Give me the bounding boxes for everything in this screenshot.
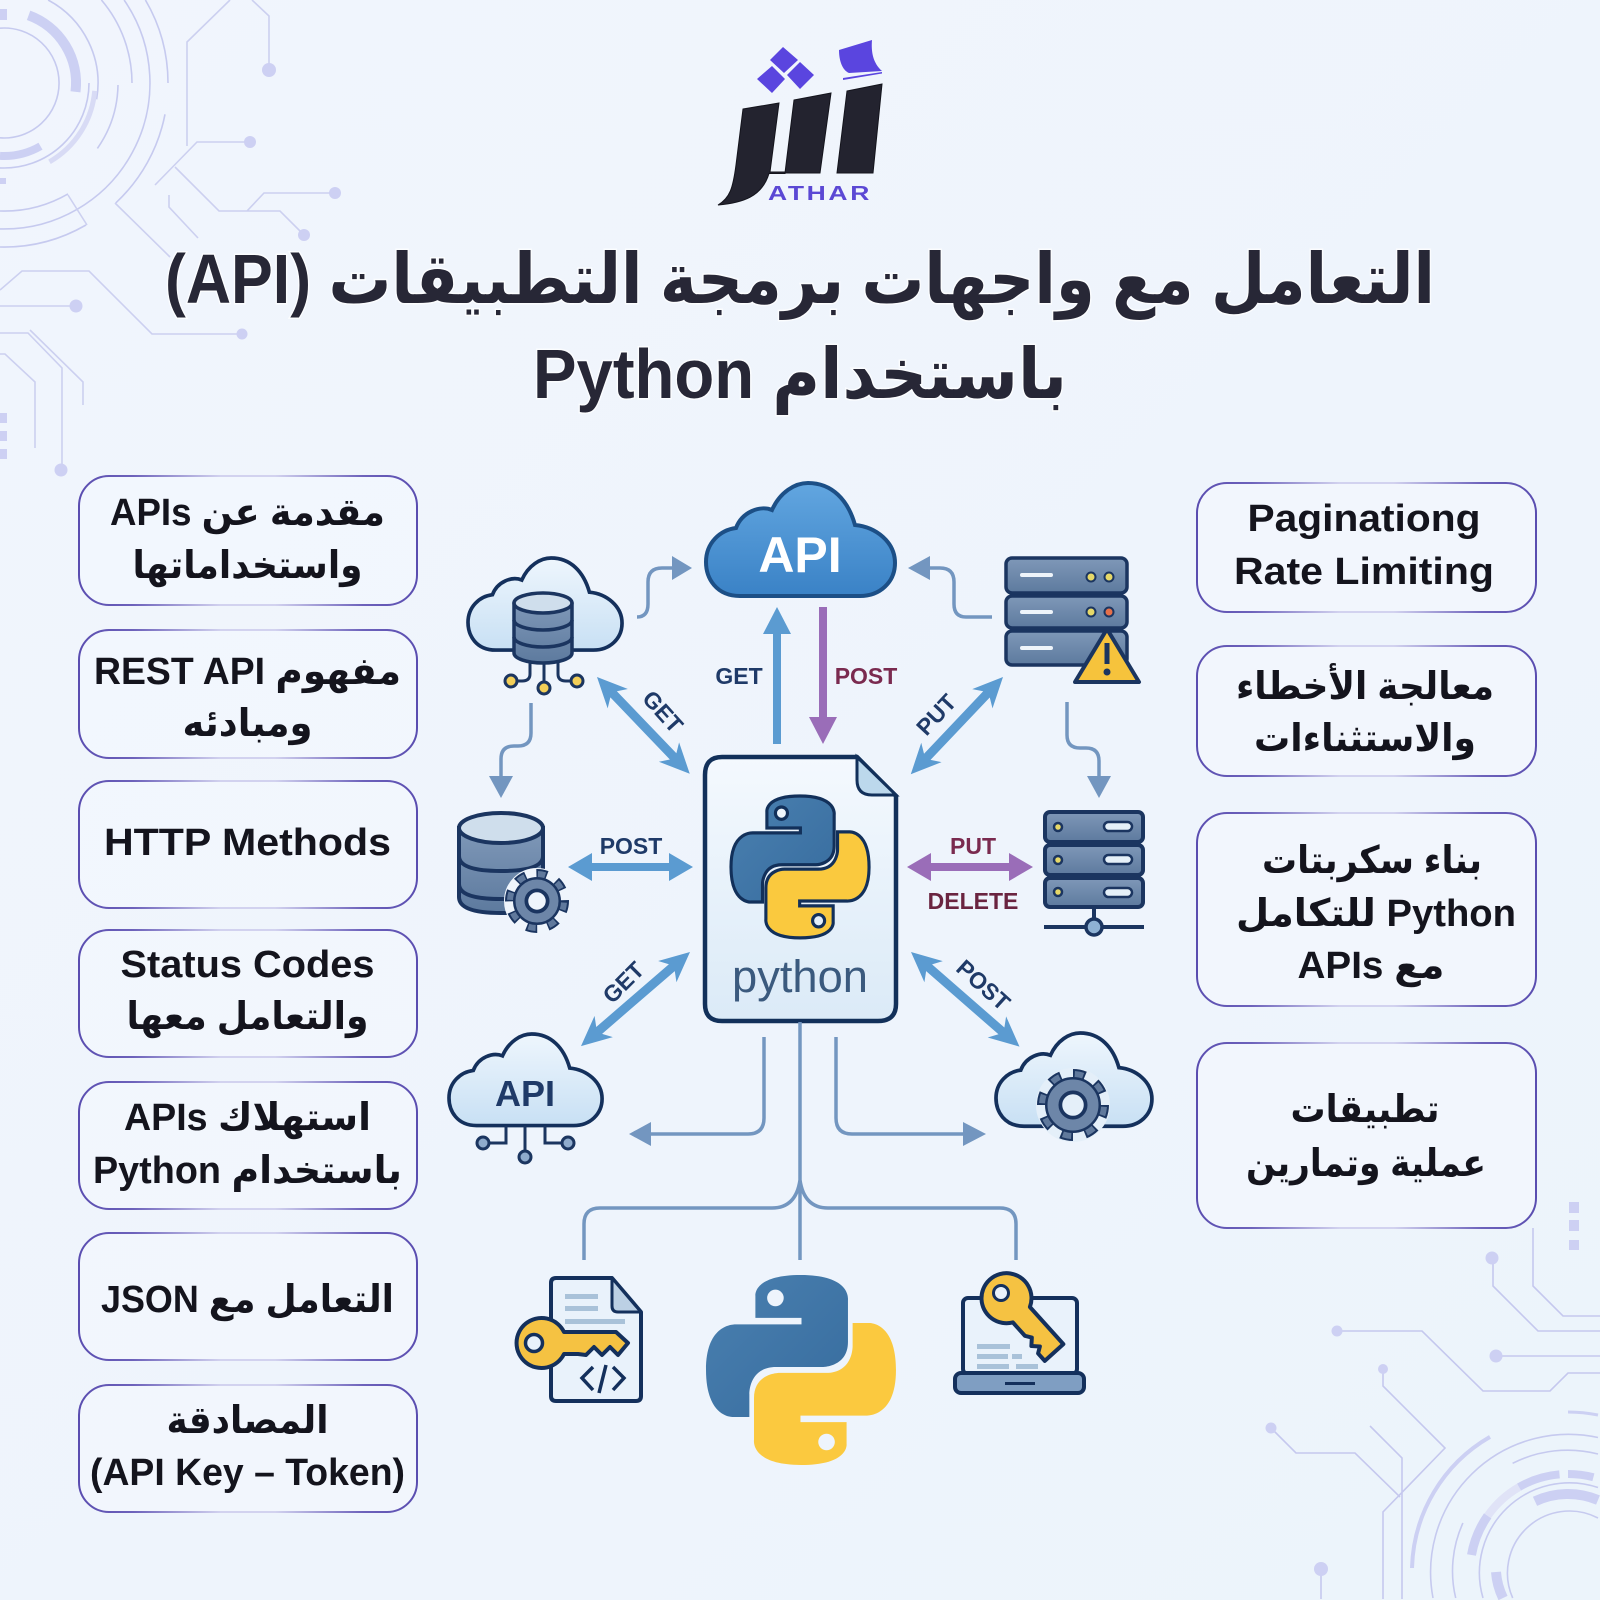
label: PUT: PUT — [950, 833, 996, 859]
icon: network server — [1044, 812, 1144, 935]
card: REST API: ومبادئه — [182, 703, 312, 746]
key — [971, 1263, 1073, 1369]
logo letterforms — [718, 84, 882, 205]
diagram: API flow — [449, 483, 1152, 1465]
icon: API cloud with circuit: API — [495, 1073, 555, 1114]
python wordmark: python — [732, 951, 868, 1002]
arrow: Python to lower left — [629, 1037, 764, 1146]
title line 2: باستخدام Python — [533, 335, 1067, 416]
card: authentication: (API Key – Token) — [90, 1452, 405, 1494]
panel: left topic cards — [79, 476, 417, 1512]
card: introduction to APIs — [79, 476, 417, 605]
card: building Python scripts: بناء سكربتات — [1262, 840, 1482, 882]
icon: database with gear — [459, 813, 563, 927]
label: GET diagonal: GET — [637, 685, 688, 738]
card: consuming APIs with Python: باستخدام Python — [93, 1150, 402, 1193]
card: practical applications — [1197, 1043, 1536, 1228]
card: REST API — [79, 630, 417, 758]
arrow: PUT diagonal top-right — [901, 667, 1013, 784]
card: REST API: مفهوم REST API — [94, 651, 401, 694]
card: practical applications: تطبيقات — [1290, 1089, 1440, 1131]
label: PUT diagonal: PUT — [911, 689, 961, 740]
label: POST diagonal: POST — [951, 954, 1015, 1016]
python logo in file — [731, 796, 869, 938]
label: GET: GET — [715, 663, 763, 689]
arrow: PUT and DELETE horizontal — [907, 853, 1033, 881]
card: building Python scripts: مع APIs — [1298, 945, 1444, 987]
icon: laptop with key — [955, 1263, 1084, 1393]
icon: Python logo — [706, 1275, 896, 1465]
card: error handling — [1197, 646, 1536, 776]
card: Status Codes: والتعامل معها — [126, 996, 368, 1039]
arrow: GET up — [763, 607, 791, 744]
arrow: POST diagonal bottom-right — [902, 941, 1029, 1057]
label: POST: POST — [600, 833, 662, 859]
card: consuming APIs with Python: استهلاك APIs — [124, 1097, 371, 1139]
card: working with JSON: التعامل مع JSON — [101, 1279, 394, 1321]
icon: API cloud — [706, 483, 895, 596]
card: Status Codes — [79, 930, 417, 1057]
card: Status Codes: Status Codes — [120, 944, 374, 986]
arrow: warning server to server — [1067, 702, 1111, 798]
panel: right topic cards — [1197, 483, 1536, 1228]
title line 1: التعامل مع واجهات برمجة التطبيقات (API) — [165, 240, 1435, 320]
card: authentication — [79, 1385, 417, 1512]
card: introduction to APIs: واستخداماتها — [132, 545, 362, 588]
arrow: cloud database to database — [489, 703, 531, 798]
icon: cloud with gear — [996, 1033, 1152, 1135]
card: pagination and rate limiting — [1197, 483, 1536, 612]
logo hamza — [839, 40, 882, 80]
icon: Python file — [705, 757, 896, 1021]
connector: Python to bottom icons — [584, 1022, 1016, 1260]
card: introduction to APIs: مقدمة عن APIs — [110, 492, 385, 534]
logo diamonds — [757, 47, 814, 93]
label: DELETE: DELETE — [928, 888, 1018, 914]
label: POST: POST — [835, 663, 897, 689]
arrow: POST down — [809, 607, 837, 744]
card: consuming APIs with Python — [79, 1082, 417, 1209]
card: pagination and rate limiting: Rate Limiting — [1234, 551, 1494, 593]
icon: server with warning — [1006, 558, 1139, 682]
arrow: server to API — [908, 556, 992, 617]
card: authentication: المصادقة — [166, 1400, 328, 1442]
logo wordmark: ATHAR — [768, 183, 872, 205]
arrow: cloud database to API — [637, 556, 692, 617]
key — [517, 1318, 628, 1368]
decoration: top-left rings and circuit traces — [0, 0, 341, 476]
arrow: Python to lower right — [836, 1037, 986, 1146]
label: GET diagonal: GET — [597, 956, 649, 1008]
icon: API cloud: API — [758, 527, 842, 583]
logo: Athar — [718, 40, 882, 205]
card: HTTP Methods: HTTP Methods — [104, 822, 391, 864]
card: building Python scripts — [1197, 813, 1536, 1006]
icon: API cloud with circuit — [449, 1034, 602, 1163]
card: working with JSON — [79, 1233, 417, 1360]
arrow: GET diagonal bottom-left — [572, 941, 699, 1057]
card: pagination and rate limiting: Paginationg — [1248, 498, 1480, 540]
decoration: bottom-right rings and circuit traces — [1266, 1202, 1600, 1599]
arrow: GET diagonal top-left — [587, 667, 700, 783]
arrow: POST horizontal — [568, 853, 693, 881]
card: practical applications: عملية وتمارين — [1246, 1143, 1486, 1186]
card: HTTP Methods — [79, 781, 417, 908]
title — [165, 240, 1435, 416]
icon: document with key — [517, 1278, 641, 1401]
card: error handling: معالجة الأخطاء — [1236, 662, 1494, 708]
card: error handling: والاستثناءات — [1254, 718, 1476, 761]
card: building Python scripts: Python للتكامل — [1236, 893, 1516, 935]
icon: cloud database — [468, 558, 622, 694]
